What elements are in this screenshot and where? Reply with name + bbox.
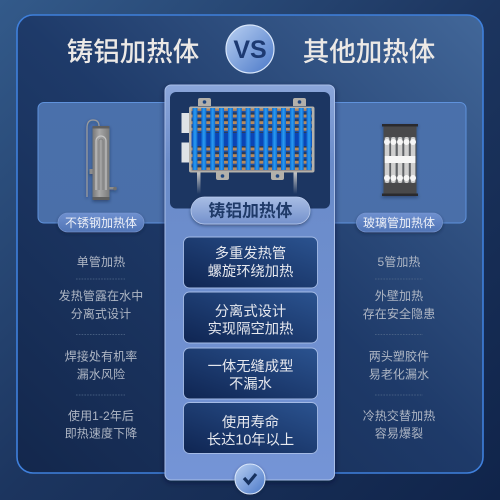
list: glass tube drawbacks: 5管加热 (377, 254, 421, 269)
list: glass tube drawbacks: 容易爆裂 (375, 426, 423, 440)
card: spiral heating (184, 237, 318, 288)
VS badge (226, 25, 274, 73)
icon: check mark badge (235, 464, 265, 494)
card: seamless moulding (184, 348, 318, 399)
card: seamless moulding: 不漏水 (229, 376, 272, 392)
panel: cast aluminium heater highlight (165, 85, 334, 480)
icon: stainless steel heater (87, 120, 117, 200)
label: stainless steel heater (58, 213, 144, 232)
list: glass tube drawbacks: 两头塑胶件 (369, 348, 429, 364)
card: long service life: 使用寿命 (222, 413, 279, 431)
card: separated design: 实现隔空加热 (208, 320, 293, 338)
list: glass tube drawbacks: 冷热交替加热 (363, 408, 435, 423)
list: stainless steel drawbacks: 使用1-2年后 (68, 408, 134, 423)
list: glass tube drawbacks: 易老化漏水 (369, 368, 429, 382)
card: separated design: 分离式设计 (215, 303, 286, 320)
label: stainless steel heater: 不锈钢加热体 (65, 216, 137, 230)
list: glass tube drawbacks (363, 254, 435, 440)
image background (170, 92, 330, 208)
list: stainless steel drawbacks: 分离式设计 (71, 306, 131, 321)
list: stainless steel drawbacks: 即热速度下降 (65, 426, 137, 440)
icon: glass tube heater (382, 124, 418, 196)
card: spiral heating: 多重发热管 (215, 245, 286, 262)
card: separated design (184, 292, 318, 343)
list: glass tube drawbacks: 外壁加热 (375, 288, 423, 303)
label: cast aluminium heater: 铸铝加热体 (209, 200, 293, 220)
panel: glass tube heater (327, 102, 466, 223)
card: seamless moulding: 一体无缝成型 (208, 358, 293, 375)
list: stainless steel drawbacks: 漏水风险 (77, 366, 125, 382)
list: stainless steel drawbacks: 发热管露在水中 (59, 288, 143, 303)
card: spiral heating: 螺旋环绕加热 (208, 263, 293, 280)
list: stainless steel drawbacks: 单管加热 (77, 254, 125, 269)
card: long service life (184, 402, 318, 454)
icon: cast aluminium heater block (182, 98, 314, 194)
panel: stainless steel heater (38, 102, 173, 223)
VS badge: VS (233, 36, 267, 64)
label: glass tube heater (356, 213, 442, 232)
list: stainless steel drawbacks (59, 254, 143, 440)
label: cast aluminium heater (191, 197, 310, 224)
list: stainless steel drawbacks: 焊接处有机率 (65, 348, 137, 364)
list: glass tube drawbacks: 存在安全隐患 (363, 306, 435, 321)
card: long service life: 长达10年以上 (207, 432, 294, 448)
label: glass tube heater: 玻璃管加热体 (363, 215, 435, 230)
heading: other heaters: 其他加热体 (303, 37, 435, 67)
heading: cast aluminium heater: 铸铝加热体 (67, 37, 199, 67)
